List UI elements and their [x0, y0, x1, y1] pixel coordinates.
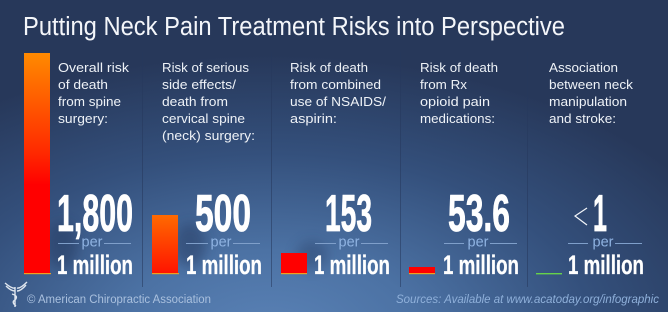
per: per — [468, 234, 488, 250]
description: opioid pain — [420, 94, 490, 109]
panel: spine surgery — [24, 53, 133, 280]
value: 1,800 — [57, 185, 133, 243]
value: 53.6 — [448, 185, 510, 243]
description: cervical spine — [162, 111, 245, 126]
per: per — [210, 234, 232, 250]
per — [568, 234, 642, 250]
panel: neck manipulation: 1 — [593, 185, 607, 243]
panel: cervical surgery — [152, 60, 262, 280]
description: and stroke: — [549, 111, 616, 126]
description: use of NSAIDS/ — [290, 94, 386, 109]
footer: copyright: © American Chiropractic Association — [27, 294, 211, 306]
description: surgery: — [58, 111, 108, 126]
unit: 1 million — [186, 250, 262, 280]
per: per — [592, 234, 614, 250]
value: 500 — [195, 185, 251, 243]
value — [575, 185, 607, 243]
description: between neck — [549, 77, 634, 92]
description: death from — [162, 94, 228, 109]
description: Risk of death — [290, 60, 368, 75]
description: manipulation — [549, 94, 627, 109]
bar: 1,800 — [24, 53, 51, 274]
bar: 500 — [152, 215, 179, 274]
value: 153 — [325, 185, 372, 243]
unit: 1 million — [443, 250, 519, 280]
description: from combined — [290, 77, 381, 92]
bar: less than 1 — [536, 273, 562, 274]
description: Association — [549, 60, 618, 75]
description: (neck) surgery: — [162, 128, 255, 143]
description: side effects/ — [162, 77, 236, 92]
panel: neck manipulation — [536, 60, 644, 280]
unit: 1 million — [57, 250, 133, 280]
per — [186, 234, 260, 250]
description: from Rx — [420, 77, 468, 92]
unit: 1 million — [314, 250, 390, 280]
per — [58, 234, 131, 250]
description: of death — [58, 77, 108, 92]
per: per — [82, 234, 102, 250]
per — [315, 234, 388, 250]
description: Overall risk — [58, 60, 130, 75]
footer: sources: Sources: Available at www.acatoday.org/infographic — [396, 294, 659, 306]
icon: caduceus logo — [5, 282, 27, 307]
per — [444, 234, 517, 250]
title: Putting Neck Pain Treatment Risks into Perspective — [23, 13, 565, 41]
description: Risk of serious — [162, 60, 250, 75]
description: Risk of death — [420, 60, 498, 75]
panel: NSAIDs — [281, 60, 390, 280]
description: medications: — [420, 111, 495, 126]
bar: 153 — [281, 253, 307, 274]
description: aspirin: — [290, 111, 337, 126]
description: from spine — [58, 94, 121, 109]
bar: 53.6 — [409, 267, 435, 274]
per: per — [338, 234, 360, 250]
panel: opioids — [409, 60, 519, 280]
